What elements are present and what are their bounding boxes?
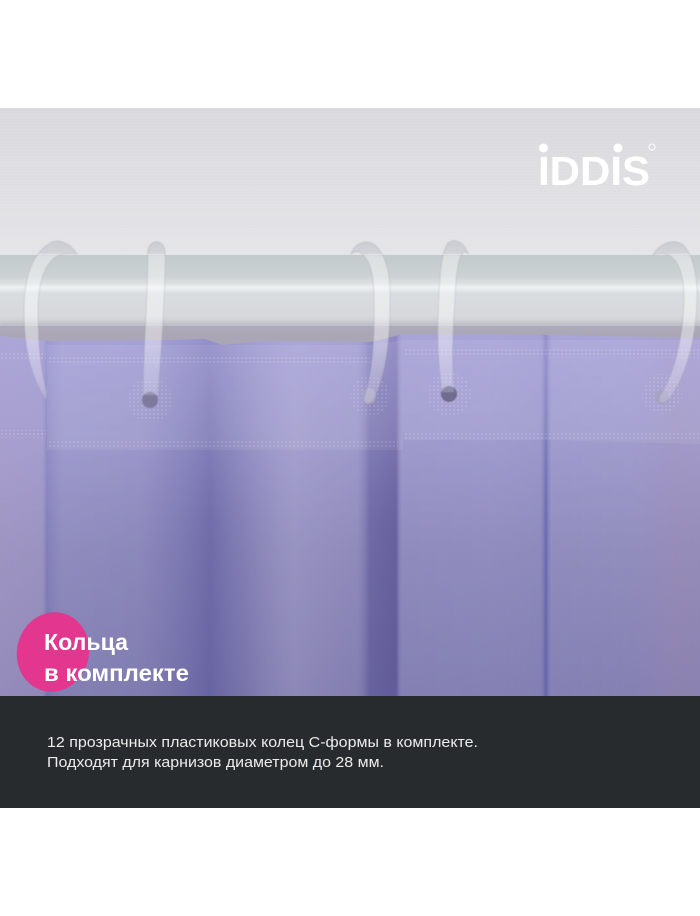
ring 2 [143,242,165,395]
pink blob behind heading [8,604,98,700]
heading [44,629,189,686]
curtain rod [0,255,700,326]
photo: shower curtain on rod with rings [0,108,700,696]
ring 4 [438,241,468,392]
description text: 12 прозрачных пластиковых колец С-формы в комплекте. [47,734,478,751]
rod lower shadow [0,322,700,332]
ring 1 [24,241,77,400]
dark description panel [0,696,700,808]
perforated seams [0,349,700,447]
heading: в комплекте [44,660,189,686]
curtain hem band [47,340,700,450]
description text [47,734,478,771]
ring 5 [653,242,697,403]
heading: Кольца [44,629,128,655]
shadow gap behind the rod [0,320,700,350]
logo: iddis: IDDIS [538,148,650,194]
curtain [0,334,700,696]
ring 3 [351,242,390,404]
eyelet holes [128,372,682,422]
description text: Подходят для карнизов диаметром до 28 мм. [47,754,384,771]
wall background [0,108,700,258]
plastic rings [24,241,697,404]
